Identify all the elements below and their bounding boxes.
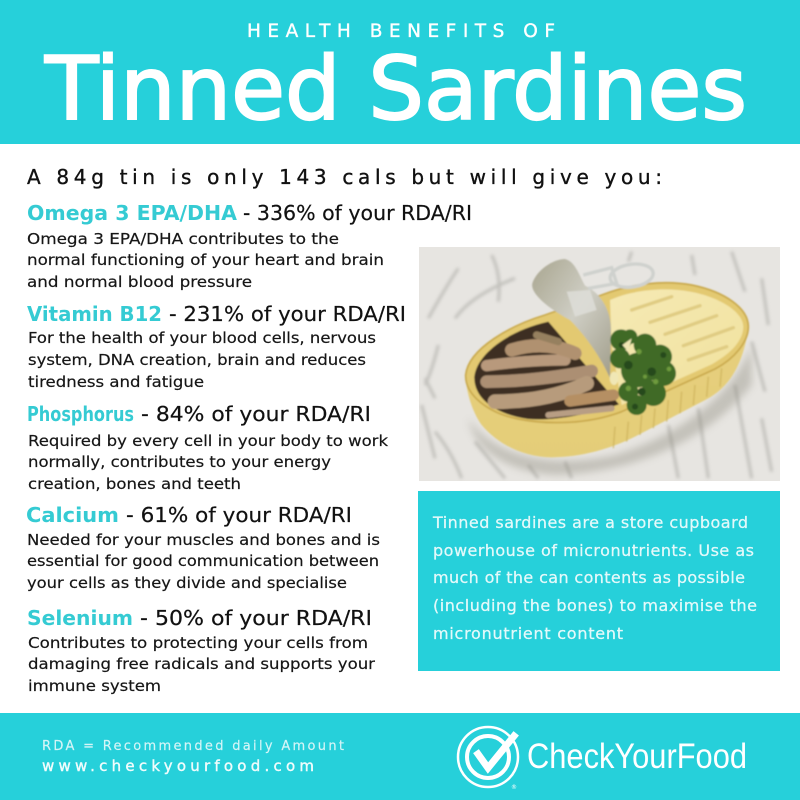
nutrient: omega 3 [27, 201, 472, 291]
nutrient: phosphorus: Phosphorus [27, 402, 134, 426]
website: www.checkyourfood.com [42, 757, 314, 775]
nutrient: vitamin b12: system, DNA creation, brain and reduces [28, 351, 366, 369]
open lid [532, 259, 611, 378]
nutrient: calcium: essential for good communication between [27, 552, 379, 570]
lid [610, 289, 743, 405]
nutrient: phosphorus: creation, bones and teeth [28, 475, 241, 493]
ring pull [583, 261, 655, 290]
logo [458, 727, 747, 791]
nutrient: omega 3: normal functioning of your heart and brain [27, 251, 384, 269]
lid ribs [632, 297, 733, 360]
footer banner [0, 713, 800, 800]
callout text: Tinned sardines are a store cupboard [432, 513, 748, 532]
nutrient: phosphorus: Required by every cell in your body to work [28, 432, 388, 450]
nutrient: omega 3: and normal blood pressure [27, 273, 252, 291]
rim [466, 283, 748, 423]
nutrient: vitamin b12: - 231% of your RDA/RI [169, 302, 406, 326]
nutrient: calcium: - 61% of your RDA/RI [126, 503, 352, 527]
callout text: much of the can contents as possible [433, 568, 745, 587]
nutrient: vitamin b12 [27, 302, 406, 391]
can ribs [613, 368, 722, 448]
RDA note: RDA = Recommended daily Amount [42, 739, 344, 754]
parsley [610, 329, 676, 415]
nutrient list [26, 201, 472, 695]
header banner [0, 0, 800, 144]
nutrient: selenium: damaging free radicals and supports your [28, 655, 376, 673]
nutrient: calcium: Calcium [26, 503, 119, 527]
nutrient: omega 3: Omega 3 EPA/DHA contributes to the [27, 230, 339, 248]
logo icon: check mark in circle [458, 727, 518, 787]
nutrient: vitamin b12: For the health of your blood cells, nervous [28, 329, 376, 347]
nutrient: omega 3: Omega 3 EPA/DHA [27, 201, 238, 225]
callout text [432, 513, 757, 643]
registered mark: ® [511, 784, 517, 791]
nutrient: selenium: Contributes to protecting your cells from [28, 634, 368, 652]
nutrient: vitamin b12: tiredness and fatigue [28, 373, 204, 391]
nutrient: calcium [26, 503, 380, 592]
fish well [474, 322, 619, 419]
nutrient: omega 3: - 336% of your RDA/RI [243, 201, 472, 225]
logo wordmark: CheckYourFood [527, 737, 747, 776]
nutrient: calcium: Needed for your muscles and bones and is [27, 531, 380, 549]
nutrient: selenium: immune system [28, 677, 161, 695]
callout panel [418, 491, 780, 671]
callout text: powerhouse of micronutrients. Use as [433, 541, 754, 560]
nutrient: vitamin b12: Vitamin B12 [27, 302, 162, 326]
header kicker: HEALTH BENEFITS OF [247, 21, 555, 42]
fish [487, 335, 613, 415]
nutrient: phosphorus [27, 402, 388, 493]
can body [466, 328, 748, 457]
nutrient: selenium [27, 606, 376, 695]
main title: Tinned Sardines [44, 38, 747, 140]
nutrient: phosphorus: normally, contributes to your energy [28, 453, 331, 471]
callout text: micronutrient content [433, 624, 623, 643]
photo: open sardine tin on wooden table [419, 247, 780, 481]
nutrient: selenium: Selenium [27, 606, 133, 630]
nutrient: phosphorus: - 84% of your RDA/RI [141, 402, 371, 426]
nutrient: selenium: - 50% of your RDA/RI [140, 606, 372, 630]
intro line: A 84g tin is only 143 cals but will give you: [27, 165, 662, 189]
callout text: (including the bones) to maximise the [433, 596, 757, 615]
nutrient: calcium: your cells as they divide and specialise [27, 574, 347, 592]
